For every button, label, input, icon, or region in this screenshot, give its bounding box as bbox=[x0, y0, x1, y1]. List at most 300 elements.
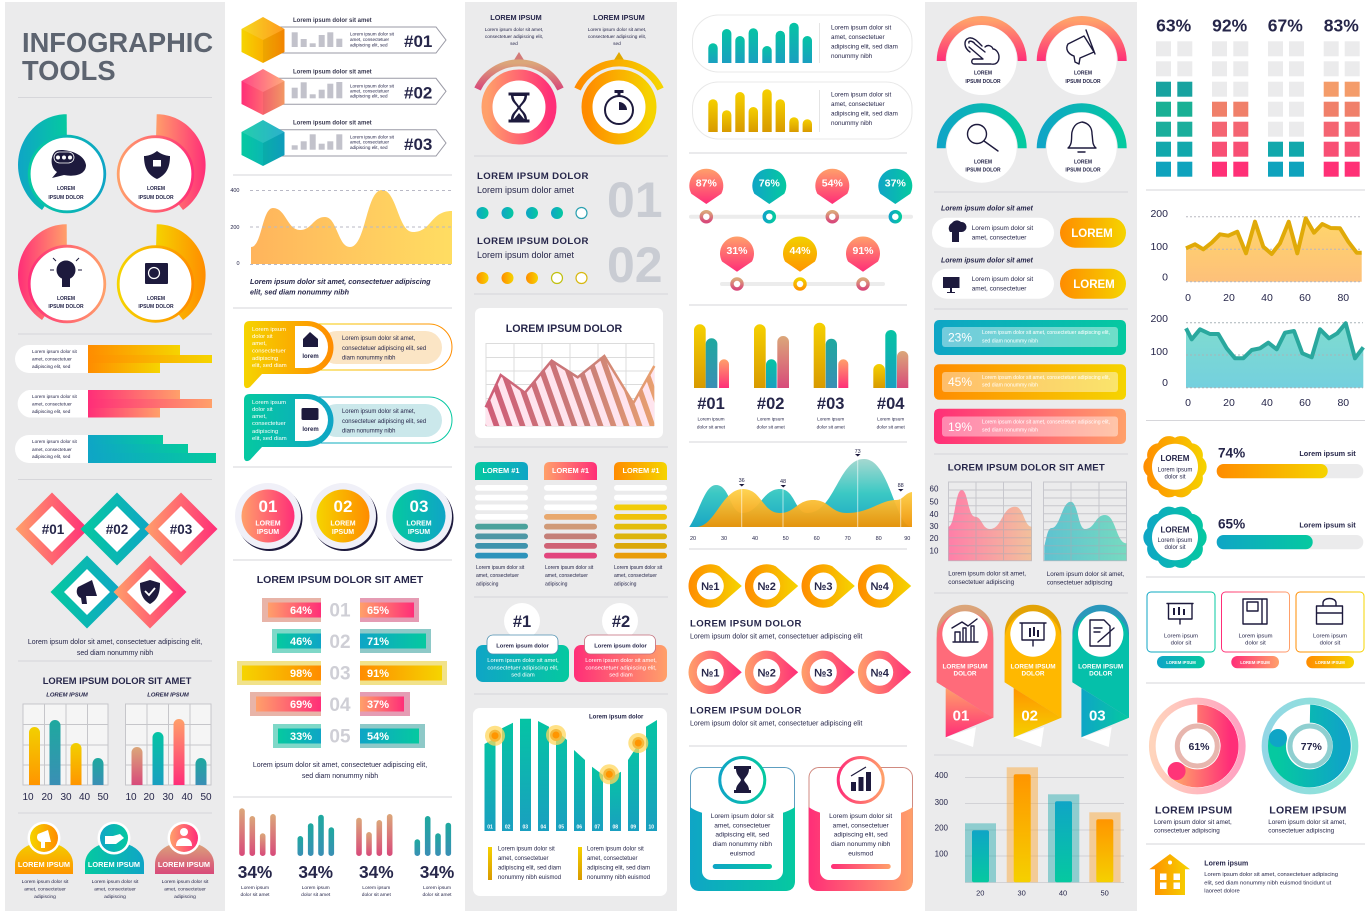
heading: column 1 chart: LOREM IPSUM DOLOR SIT AMET bbox=[43, 675, 192, 686]
pricing table: pink: adipiscing bbox=[545, 582, 568, 588]
mini bars group 4: dolor sit amet bbox=[422, 892, 452, 898]
progress row 65%: 65% bbox=[1218, 516, 1245, 531]
area chart: pink: 10 bbox=[930, 546, 939, 556]
area chart: pink: Lorem ipsum dolor sit amet, bbox=[948, 571, 1026, 578]
card: column chart with markers: Lorem ipsum dolor sit bbox=[587, 846, 644, 852]
waffle 92%: 92% bbox=[1212, 16, 1248, 36]
numbered pointers: pink bbox=[689, 651, 911, 727]
spiral badge: safe bbox=[118, 224, 206, 321]
numbered pointers: yellow bbox=[689, 564, 911, 641]
progress row 74%: 74% bbox=[1218, 445, 1245, 460]
mini bars group 1 bbox=[238, 808, 276, 898]
area chart: pink: 60 bbox=[930, 484, 939, 494]
icon box: teal bbox=[1147, 592, 1215, 668]
house note: laoreet dolore bbox=[1204, 889, 1240, 895]
gauge: stopwatch: sed bbox=[613, 41, 621, 47]
numbered pointers: yellow: №2 bbox=[758, 581, 776, 593]
pill chart: yellow: nonummy nibh bbox=[831, 120, 873, 127]
donut 61%: 61% bbox=[1188, 741, 1210, 753]
ribbon 02: 02 bbox=[1021, 708, 1038, 725]
pin timeline: row 2: 91% bbox=[852, 245, 874, 257]
percent banner 19% bbox=[934, 409, 1126, 444]
button row 2: amet, consectetuer bbox=[972, 285, 1027, 292]
percent banner 45%: Lorem ipsum dolor sit amet, consectetuer adipiscing elit, bbox=[982, 375, 1110, 381]
mini bars group 3: dolor sit amet bbox=[362, 892, 391, 898]
butterfly caption: Lorem ipsum dolor sit amet, consectetuer adipiscing elit, bbox=[253, 762, 427, 769]
diamond #03 bbox=[144, 492, 218, 566]
panel: column 1 background bbox=[5, 2, 225, 911]
mini bars group 3 bbox=[356, 814, 394, 898]
area chart: pink: 40 bbox=[930, 510, 939, 519]
speech panel: orange: adipiscing bbox=[252, 356, 278, 362]
icon box: yellow: LOREM IPSUM bbox=[1315, 660, 1345, 665]
card #2: consectetuer adipiscing elit, bbox=[585, 666, 657, 672]
bar chart: left: 50 bbox=[97, 792, 109, 803]
donut 77%: Lorem ipsum dolor sit amet, bbox=[1268, 819, 1346, 826]
title: INFOGRAPHIC bbox=[22, 27, 213, 58]
icon box: pink: dolor sit bbox=[1245, 640, 1266, 646]
pricing table: pink bbox=[544, 462, 597, 588]
card #2: sed diam bbox=[609, 672, 633, 678]
donut 61%: Lorem ipsum dolor sit amet, bbox=[1154, 819, 1232, 826]
bar chart: offset columns: 20 bbox=[976, 889, 984, 898]
diamonds caption: sed diam nonummy nibh bbox=[77, 650, 153, 657]
icon box: teal: dolor sit bbox=[1171, 640, 1192, 646]
diamond: shield check bbox=[114, 556, 186, 628]
row 03: 03 bbox=[329, 664, 351, 684]
bar chart: offset columns: 50 bbox=[1101, 889, 1109, 898]
dome card 3: LOREM IPSUM bbox=[158, 860, 210, 869]
overlapping area chart: 36 bbox=[739, 478, 745, 484]
numbered circle 03: 03 bbox=[410, 497, 428, 516]
icon: stopwatch bbox=[605, 96, 633, 124]
button row 1 bbox=[932, 206, 1126, 248]
pricing table: teal: amet, consectetuer bbox=[476, 573, 519, 579]
area chart: orange: 0 bbox=[236, 261, 240, 267]
overlapping area chart: 88 bbox=[898, 483, 904, 489]
progress row 65% bbox=[1143, 507, 1363, 568]
speech panel: teal: Lorem ipsum dolor sit amet, bbox=[342, 409, 416, 415]
diamond #03: #03 bbox=[170, 522, 193, 537]
pin timeline: row 1: 54% bbox=[822, 178, 843, 190]
arc badge: bell: LOREM bbox=[1074, 159, 1092, 165]
pin timeline: row 1 bbox=[689, 169, 913, 222]
icon: briefcase outline bbox=[1316, 598, 1342, 624]
spiral badge: bulb: LOREM bbox=[57, 296, 75, 302]
line area chart: yellow: 0 bbox=[1162, 272, 1168, 284]
icon box: pink: LOREM IPSUM bbox=[1240, 660, 1270, 665]
numbered pointers: yellow: №3 bbox=[814, 581, 832, 593]
icon box: yellow bbox=[1296, 592, 1364, 668]
line area chart: teal: 0 bbox=[1162, 377, 1168, 389]
bar chart: right: 10 bbox=[125, 792, 137, 803]
numbered circle 01: 01 bbox=[259, 497, 277, 516]
pin timeline: row 1: 37% bbox=[885, 178, 906, 190]
arc badge: hand: LOREM bbox=[974, 71, 992, 77]
area chart: pink: consectetuer adipiscing bbox=[948, 579, 1015, 586]
heading: butterfly chart: LOREM IPSUM DOLOR SIT AMET bbox=[257, 574, 424, 586]
heading: twin area charts: LOREM IPSUM DOLOR SIT AMET bbox=[948, 463, 1105, 474]
diamonds caption bbox=[28, 639, 202, 657]
diamond #02: #02 bbox=[106, 522, 128, 537]
numbered pointers: pink: №4 bbox=[871, 667, 890, 679]
card: column chart with markers: 04 bbox=[541, 824, 546, 830]
icon box: yellow: Lorem ipsum bbox=[1313, 633, 1347, 639]
gauge: hourglass: sed bbox=[510, 41, 518, 47]
stacked bar row: teal: adipiscing elit, sed bbox=[32, 454, 71, 459]
speech panel: orange: Lorem ipsum bbox=[252, 327, 286, 333]
bar chart: right bbox=[125, 692, 212, 803]
card: column chart with markers: adipiscing elit, sed diam bbox=[587, 866, 650, 872]
diamond: megaphone bbox=[50, 556, 124, 628]
row 04 bbox=[250, 692, 410, 716]
rating block 02: 02 bbox=[607, 237, 663, 293]
grouped bars #01: #01 bbox=[697, 395, 725, 413]
icon: cloud server bbox=[949, 220, 967, 232]
icon: speech bubble bbox=[52, 150, 86, 178]
icon: presentation board bbox=[943, 277, 960, 288]
donut 77%: consectetuer adipiscing bbox=[1268, 828, 1335, 835]
arc badge: megaphone: LOREM bbox=[1074, 71, 1092, 77]
pill chart: teal bbox=[692, 15, 912, 72]
waffle 92% bbox=[1212, 16, 1248, 177]
button row 1: LOREM bbox=[1071, 228, 1113, 240]
icon: house bbox=[1149, 854, 1190, 895]
icon card: pink bbox=[809, 758, 913, 891]
grouped bars #02 bbox=[754, 324, 789, 429]
icon card: pink: adipiscing elit, sed bbox=[834, 832, 888, 839]
pin timeline: row 2: 44% bbox=[789, 245, 811, 257]
ribbon 02: LOREM IPSUM bbox=[1010, 663, 1056, 670]
ribbon 03: 03 bbox=[1089, 708, 1106, 725]
hex row #03: Lorem ipsum dolor sit bbox=[350, 134, 395, 139]
card: column chart with markers: amet, consectetuer bbox=[587, 856, 638, 862]
button row 2: Lorem ipsum dolor sit bbox=[972, 276, 1033, 283]
icon: house bbox=[303, 332, 318, 347]
icon card: teal: euismod bbox=[730, 850, 755, 857]
ribbon 03 bbox=[1072, 605, 1129, 747]
icon card: pink: Lorem ipsum dolor sit bbox=[829, 813, 892, 820]
icon: light bulb bbox=[56, 260, 76, 280]
pricing table: teal bbox=[475, 462, 528, 588]
icon: presentation candles bbox=[1020, 623, 1046, 646]
dome card 3: adipiscing bbox=[174, 894, 196, 900]
pin timeline: row 1: 87% bbox=[696, 178, 717, 190]
speech panel: orange: amet, bbox=[252, 341, 267, 347]
dome card 1: LOREM IPSUM bbox=[18, 860, 70, 869]
pill chart: yellow bbox=[692, 82, 912, 139]
line area chart: teal: 0 bbox=[1185, 397, 1191, 409]
mini bars group 2 bbox=[298, 815, 334, 898]
pricing table: yellow: amet, consectetuer bbox=[614, 573, 657, 579]
spiral badge: bulb bbox=[18, 224, 105, 322]
grouped bars #04: Lorem ipsum bbox=[877, 417, 904, 422]
gauge: stopwatch: LOREM IPSUM bbox=[593, 13, 645, 22]
stacked bar row: pink: Lorem ipsum dolor sit bbox=[32, 394, 78, 399]
numbered circle 03: IPSUM bbox=[408, 529, 430, 536]
pricing table: yellow: LOREM #1 bbox=[623, 466, 659, 475]
card: column chart with markers: nonummy nibh euismod bbox=[587, 875, 650, 881]
card: column chart with markers: amet, consectetuer bbox=[498, 856, 549, 862]
card: column chart with markers: 02 bbox=[505, 824, 511, 830]
row 03 bbox=[237, 661, 447, 685]
card: column chart with markers: 01 bbox=[487, 824, 493, 830]
progress row 65%: LOREM bbox=[1161, 526, 1190, 535]
pricing table: teal: LOREM #1 bbox=[483, 466, 519, 475]
overlapping area chart: 30 bbox=[721, 536, 727, 542]
hex row #01 bbox=[242, 17, 446, 63]
diamonds group bbox=[16, 492, 218, 628]
pricing table: teal: Lorem ipsum dolor sit bbox=[476, 565, 525, 571]
grouped bars #04 bbox=[873, 330, 908, 429]
bar chart: left: 20 bbox=[41, 792, 53, 803]
hex row #01: Lorem ipsum dolor sit bbox=[350, 32, 395, 36]
speech panel: orange: Lorem ipsum dolor sit amet, bbox=[342, 336, 416, 342]
grouped bars #03 bbox=[814, 323, 848, 429]
progress row 65%: Lorem ipsum bbox=[1158, 538, 1192, 544]
bar chart: left: 30 bbox=[60, 792, 72, 803]
spiral badge: chat: IPSUM DOLOR bbox=[48, 195, 84, 201]
stacked bar row: pink bbox=[18, 390, 212, 418]
spiral badge: chat: LOREM bbox=[57, 186, 75, 192]
dome card 1: Lorem ipsum dolor sit bbox=[22, 879, 69, 885]
percent banner 23%: sed diam nonummy nibh bbox=[982, 338, 1038, 344]
dome card 3: Lorem ipsum dolor sit bbox=[162, 879, 209, 885]
bar chart: offset columns: 300 bbox=[935, 798, 949, 807]
area chart: teal: consectetuer adipiscing bbox=[1047, 580, 1113, 587]
row 01 bbox=[262, 598, 419, 622]
card: column chart with markers bbox=[473, 708, 667, 896]
numbered pointers: pink: №2 bbox=[758, 667, 776, 679]
numbered pointers: yellow: LOREM IPSUM DOLOR bbox=[690, 619, 802, 630]
spiral badge: safe: LOREM bbox=[147, 296, 165, 302]
icon card: teal: diam nonummy nibh bbox=[713, 841, 772, 848]
stacked bar row: yellow: amet, consectetuer bbox=[32, 356, 72, 362]
stacked bar row: teal: amet, consectetuer bbox=[32, 447, 72, 452]
line area chart: teal: 200 bbox=[1150, 313, 1168, 325]
progress row 74%: Lorem ipsum bbox=[1158, 468, 1192, 474]
hex row #02 bbox=[242, 69, 446, 115]
house note: Lorem ipsum bbox=[1204, 861, 1248, 868]
hex row #02: Lorem ipsum dolor sit bbox=[350, 83, 395, 88]
hex row #02: amet, consectetuer bbox=[350, 89, 390, 94]
bar chart: right: LOREM IPSUM bbox=[147, 692, 190, 698]
card: column chart with markers: 10 bbox=[649, 824, 654, 830]
card: striped line chart: LOREM IPSUM DOLOR bbox=[506, 323, 623, 335]
waffle 63% bbox=[1156, 16, 1192, 177]
pricing table: yellow: adipiscing bbox=[614, 582, 637, 588]
card: column chart with markers: 07 bbox=[595, 824, 600, 830]
icon: board bbox=[1167, 604, 1193, 624]
percent banner 19%: sed diam nonummy nibh bbox=[982, 427, 1038, 433]
pin timeline: row 1: 76% bbox=[759, 178, 780, 190]
bar chart: left: 10 bbox=[22, 792, 34, 803]
line area chart: yellow bbox=[1150, 208, 1362, 304]
button row 2 bbox=[932, 257, 1126, 299]
icon: line chart bbox=[952, 619, 978, 642]
numbered circle 02: LOREM bbox=[330, 520, 356, 528]
numbered pointers: pink: Lorem ipsum dolor sit amet, consectetuer adipiscing elit bbox=[690, 720, 862, 727]
speech panel: teal: diam nonummy nibh bbox=[342, 428, 395, 434]
row 03: 91% bbox=[367, 668, 389, 680]
stacked bar row: pink: adipiscing elit, sed bbox=[32, 409, 71, 414]
pill chart: teal: amet, consectetuer bbox=[831, 34, 885, 41]
donut 61%: consectetuer adipiscing bbox=[1154, 828, 1220, 835]
row 05: 54% bbox=[367, 731, 389, 743]
speech panel: teal: amet, bbox=[252, 414, 267, 420]
row 02: 46% bbox=[290, 636, 312, 648]
grouped bars #01: Lorem ipsum bbox=[697, 417, 725, 422]
dome card 1 bbox=[15, 822, 73, 900]
speech panel: teal: adipiscing bbox=[252, 429, 278, 435]
icon card: teal: adipiscing elit, sed bbox=[715, 832, 770, 839]
area chart: pink: 50 bbox=[930, 498, 939, 506]
hex row #01: amet, consectetuer bbox=[350, 37, 390, 42]
percent banner 45%: 45% bbox=[948, 375, 972, 389]
line area chart: yellow: 0 bbox=[1185, 292, 1191, 304]
line area chart: yellow: 200 bbox=[1150, 208, 1168, 220]
bar chart: offset columns: 100 bbox=[935, 850, 949, 859]
grouped bars #02: dolor sit amet bbox=[757, 424, 785, 429]
line area chart: teal: 20 bbox=[1223, 397, 1235, 409]
mini bars group 2: 34% bbox=[298, 862, 333, 882]
button row 2: Lorem ipsum dolor sit amet bbox=[941, 257, 1033, 264]
grouped bars #03: Lorem ipsum bbox=[817, 417, 844, 422]
bar chart: offset columns: 400 bbox=[935, 771, 949, 780]
bar chart: left: LOREM IPSUM bbox=[46, 692, 89, 698]
pill chart: yellow: adipiscing elit, sed diam bbox=[831, 111, 898, 118]
pill chart: teal: nonummy nibh bbox=[831, 53, 873, 60]
spiral badge: shield: LOREM bbox=[147, 186, 165, 192]
percent banner 23%: 23% bbox=[948, 330, 972, 344]
bar chart: offset columns: 40 bbox=[1059, 889, 1067, 898]
hex row #03: adipiscing elit, sed bbox=[350, 145, 388, 150]
mini bars group 1: dolor sit amet bbox=[240, 892, 270, 898]
arc badge: magnifier: IPSUM DOLOR bbox=[965, 168, 1001, 174]
line area chart: teal bbox=[1150, 313, 1363, 409]
card: column chart with markers: adipiscing elit, sed diam bbox=[498, 866, 561, 872]
title bbox=[22, 27, 213, 86]
speech panel: teal bbox=[244, 394, 452, 461]
line area chart: teal: 60 bbox=[1299, 397, 1311, 409]
donut 61%: LOREM IPSUM bbox=[1155, 804, 1232, 816]
stacked bar row: yellow: Lorem ipsum dolor sit bbox=[32, 349, 78, 354]
rating block 02 bbox=[476, 236, 663, 293]
area chart caption: elit, sed diam nonummy nibh bbox=[250, 288, 350, 296]
pricing table: pink: Lorem ipsum dolor sit bbox=[545, 565, 594, 571]
icon: document pen bbox=[1090, 620, 1114, 646]
gauge: stopwatch: Lorem ipsum dolor sit amet, bbox=[588, 27, 646, 33]
numbered pointers: pink: №1 bbox=[701, 667, 719, 679]
icon box: teal: LOREM IPSUM bbox=[1166, 660, 1196, 665]
card: column chart with markers: 08 bbox=[613, 824, 618, 830]
arc badge: magnifier bbox=[941, 108, 1022, 183]
pin timeline: row 2 bbox=[720, 236, 885, 289]
percent banner 45% bbox=[934, 364, 1126, 400]
card #1 bbox=[476, 603, 569, 682]
overlapping area chart: 70 bbox=[845, 536, 851, 542]
speech panel: teal: dolor sit bbox=[252, 407, 273, 413]
icon box: pink: Lorem ipsum bbox=[1238, 633, 1273, 639]
bar chart: left: 40 bbox=[79, 792, 90, 803]
spiral badge: bulb: IPSUM DOLOR bbox=[48, 304, 84, 310]
waffle 83% bbox=[1324, 16, 1360, 177]
grouped bars #02: #02 bbox=[757, 395, 784, 413]
mini bars group 3: Lorem ipsum bbox=[362, 885, 390, 891]
hex row #01: #01 bbox=[404, 32, 432, 51]
line area chart: yellow: 20 bbox=[1223, 292, 1235, 304]
overlapping area chart: 73 bbox=[855, 449, 861, 455]
row 01: 64% bbox=[290, 605, 312, 617]
row 04: 04 bbox=[329, 695, 351, 716]
stacked bar row: yellow: adipiscing elit, sed bbox=[32, 364, 71, 369]
stacked bar row: pink: amet, consectetuer bbox=[32, 402, 72, 406]
bar chart: offset columns bbox=[935, 767, 1124, 898]
ribbon 01: DOLOR bbox=[953, 671, 977, 678]
gauge: stopwatch bbox=[578, 13, 660, 139]
mini bars group 1: 34% bbox=[238, 862, 272, 882]
speech panel: orange: lorem bbox=[302, 354, 319, 360]
numbered pointers: pink: LOREM IPSUM DOLOR bbox=[690, 705, 802, 716]
title: TOOLS bbox=[22, 55, 116, 86]
dome card 1: amet, consectetuer bbox=[24, 886, 66, 892]
area chart: pink: 30 bbox=[930, 522, 939, 531]
rating block 01 bbox=[476, 171, 663, 228]
house note: elit, sed diam nonummy nibh euismod tincidunt ut bbox=[1204, 880, 1332, 886]
rating block 02: Lorem ipsum dolor amet bbox=[477, 250, 575, 260]
icon: hourglass bbox=[508, 92, 530, 122]
arc badge: megaphone: IPSUM DOLOR bbox=[1065, 79, 1101, 85]
row 04: 37% bbox=[367, 699, 389, 711]
grouped bars #03: #03 bbox=[817, 395, 844, 413]
area chart: orange: 400 bbox=[230, 188, 240, 194]
mini bars group 3: 34% bbox=[359, 862, 394, 882]
hex row #03 bbox=[242, 120, 446, 166]
waffle 67%: 67% bbox=[1268, 16, 1303, 36]
card: column chart with markers: nonummy nibh euismod bbox=[498, 875, 561, 881]
hex row #02: adipiscing elit, sed bbox=[350, 94, 388, 99]
ribbon 02: DOLOR bbox=[1021, 671, 1045, 678]
progress row 74%: dolor sit bbox=[1164, 474, 1186, 480]
card #2: Lorem ipsum dolor sit amet, bbox=[585, 658, 657, 664]
numbered circle 01: IPSUM bbox=[257, 529, 279, 536]
icon card: teal: amet, consectetuer bbox=[714, 822, 771, 829]
button row 1: amet, consectetuer bbox=[972, 234, 1027, 241]
gauge: stopwatch: consectetuer adipiscing elit, bbox=[588, 34, 646, 40]
diamond #01 bbox=[16, 492, 88, 566]
panel: column 3 background bbox=[465, 2, 677, 911]
arc badge: hand: IPSUM DOLOR bbox=[965, 79, 1001, 85]
area chart: teal bbox=[1043, 482, 1127, 587]
spiral badge: chat bbox=[18, 114, 105, 212]
progress row 74%: Lorem ipsum sit bbox=[1299, 449, 1356, 458]
spiral badge: shield bbox=[118, 114, 206, 211]
card #1: #1 bbox=[513, 613, 531, 631]
arc badge: hand bbox=[941, 21, 1022, 95]
spiral badge: safe: IPSUM DOLOR bbox=[138, 304, 174, 310]
overlapping area chart bbox=[689, 449, 912, 542]
dome card 1: adipiscing bbox=[34, 894, 56, 900]
numbered circle 01 bbox=[235, 483, 302, 551]
area chart: pink bbox=[930, 482, 1032, 586]
grouped bars #04: dolor sit amet bbox=[877, 424, 905, 429]
line area chart: yellow: 40 bbox=[1261, 292, 1273, 304]
icon card: pink: diam nonummy nibh bbox=[831, 841, 891, 848]
row 05: 33% bbox=[290, 731, 312, 743]
hex row #02: Lorem ipsum dolor sit amet bbox=[293, 69, 372, 75]
hex row #03: #03 bbox=[404, 135, 432, 154]
ribbon 03: DOLOR bbox=[1089, 671, 1113, 678]
